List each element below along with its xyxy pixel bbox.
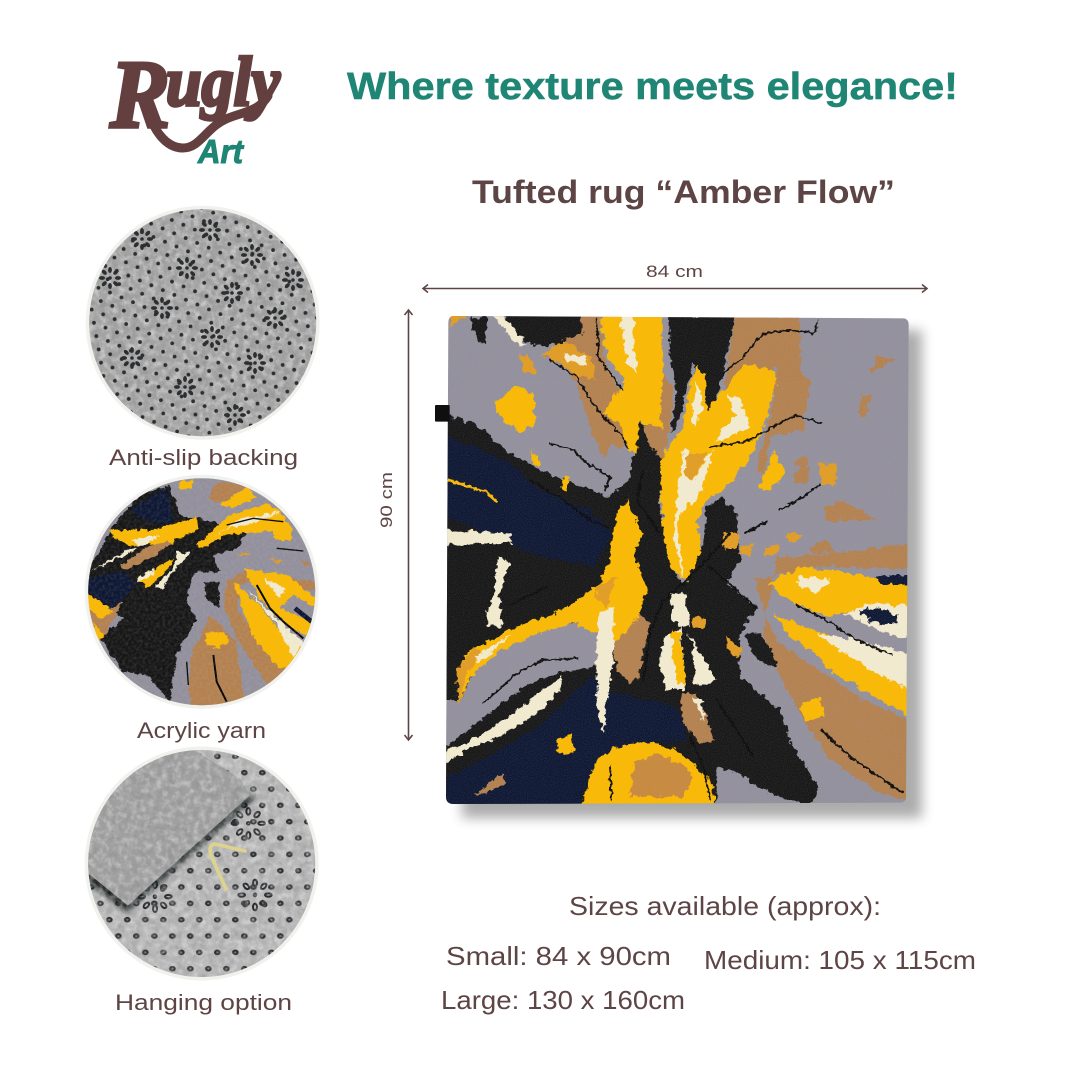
sizes heading: Sizes available (approx): (569, 891, 881, 921)
rug: pile grain (443, 313, 910, 807)
rug shadow (462, 330, 922, 818)
label: hanging option: Hanging option (115, 990, 292, 1015)
size: small: Small: 84 x 90cm (446, 941, 671, 971)
product title: Tufted rug “Amber Flow” (472, 174, 895, 210)
size: large: Large: 130 x 160cm (441, 985, 685, 1015)
label: anti-slip backing: Anti-slip backing (109, 445, 298, 470)
label: height 90 cm: 90 cm (378, 472, 396, 528)
panel: anti-slip backing photo (85, 205, 321, 441)
label: width 84 cm: 84 cm (646, 263, 703, 281)
logo swash (147, 96, 268, 148)
logo wordmark: R (109, 41, 170, 149)
logo: Rugly Art (109, 41, 281, 170)
panel: acrylic yarn photo (85, 475, 321, 711)
logo Art: Art (197, 133, 245, 170)
dimension arrow: width (423, 284, 927, 292)
size: medium: Medium: 105 x 115cm (704, 945, 976, 975)
logo wordmark: ugly (166, 44, 281, 121)
label: acrylic yarn: Acrylic yarn (137, 718, 266, 743)
panel: hanging option photo (80, 742, 321, 985)
dimension arrow: height (404, 310, 412, 740)
rug: brand tag (435, 405, 450, 422)
rug: black cracks and yellow strands (448, 318, 903, 800)
rug photo: Amber Flow (435, 313, 910, 807)
tagline: Where texture meets elegance! (347, 66, 958, 108)
